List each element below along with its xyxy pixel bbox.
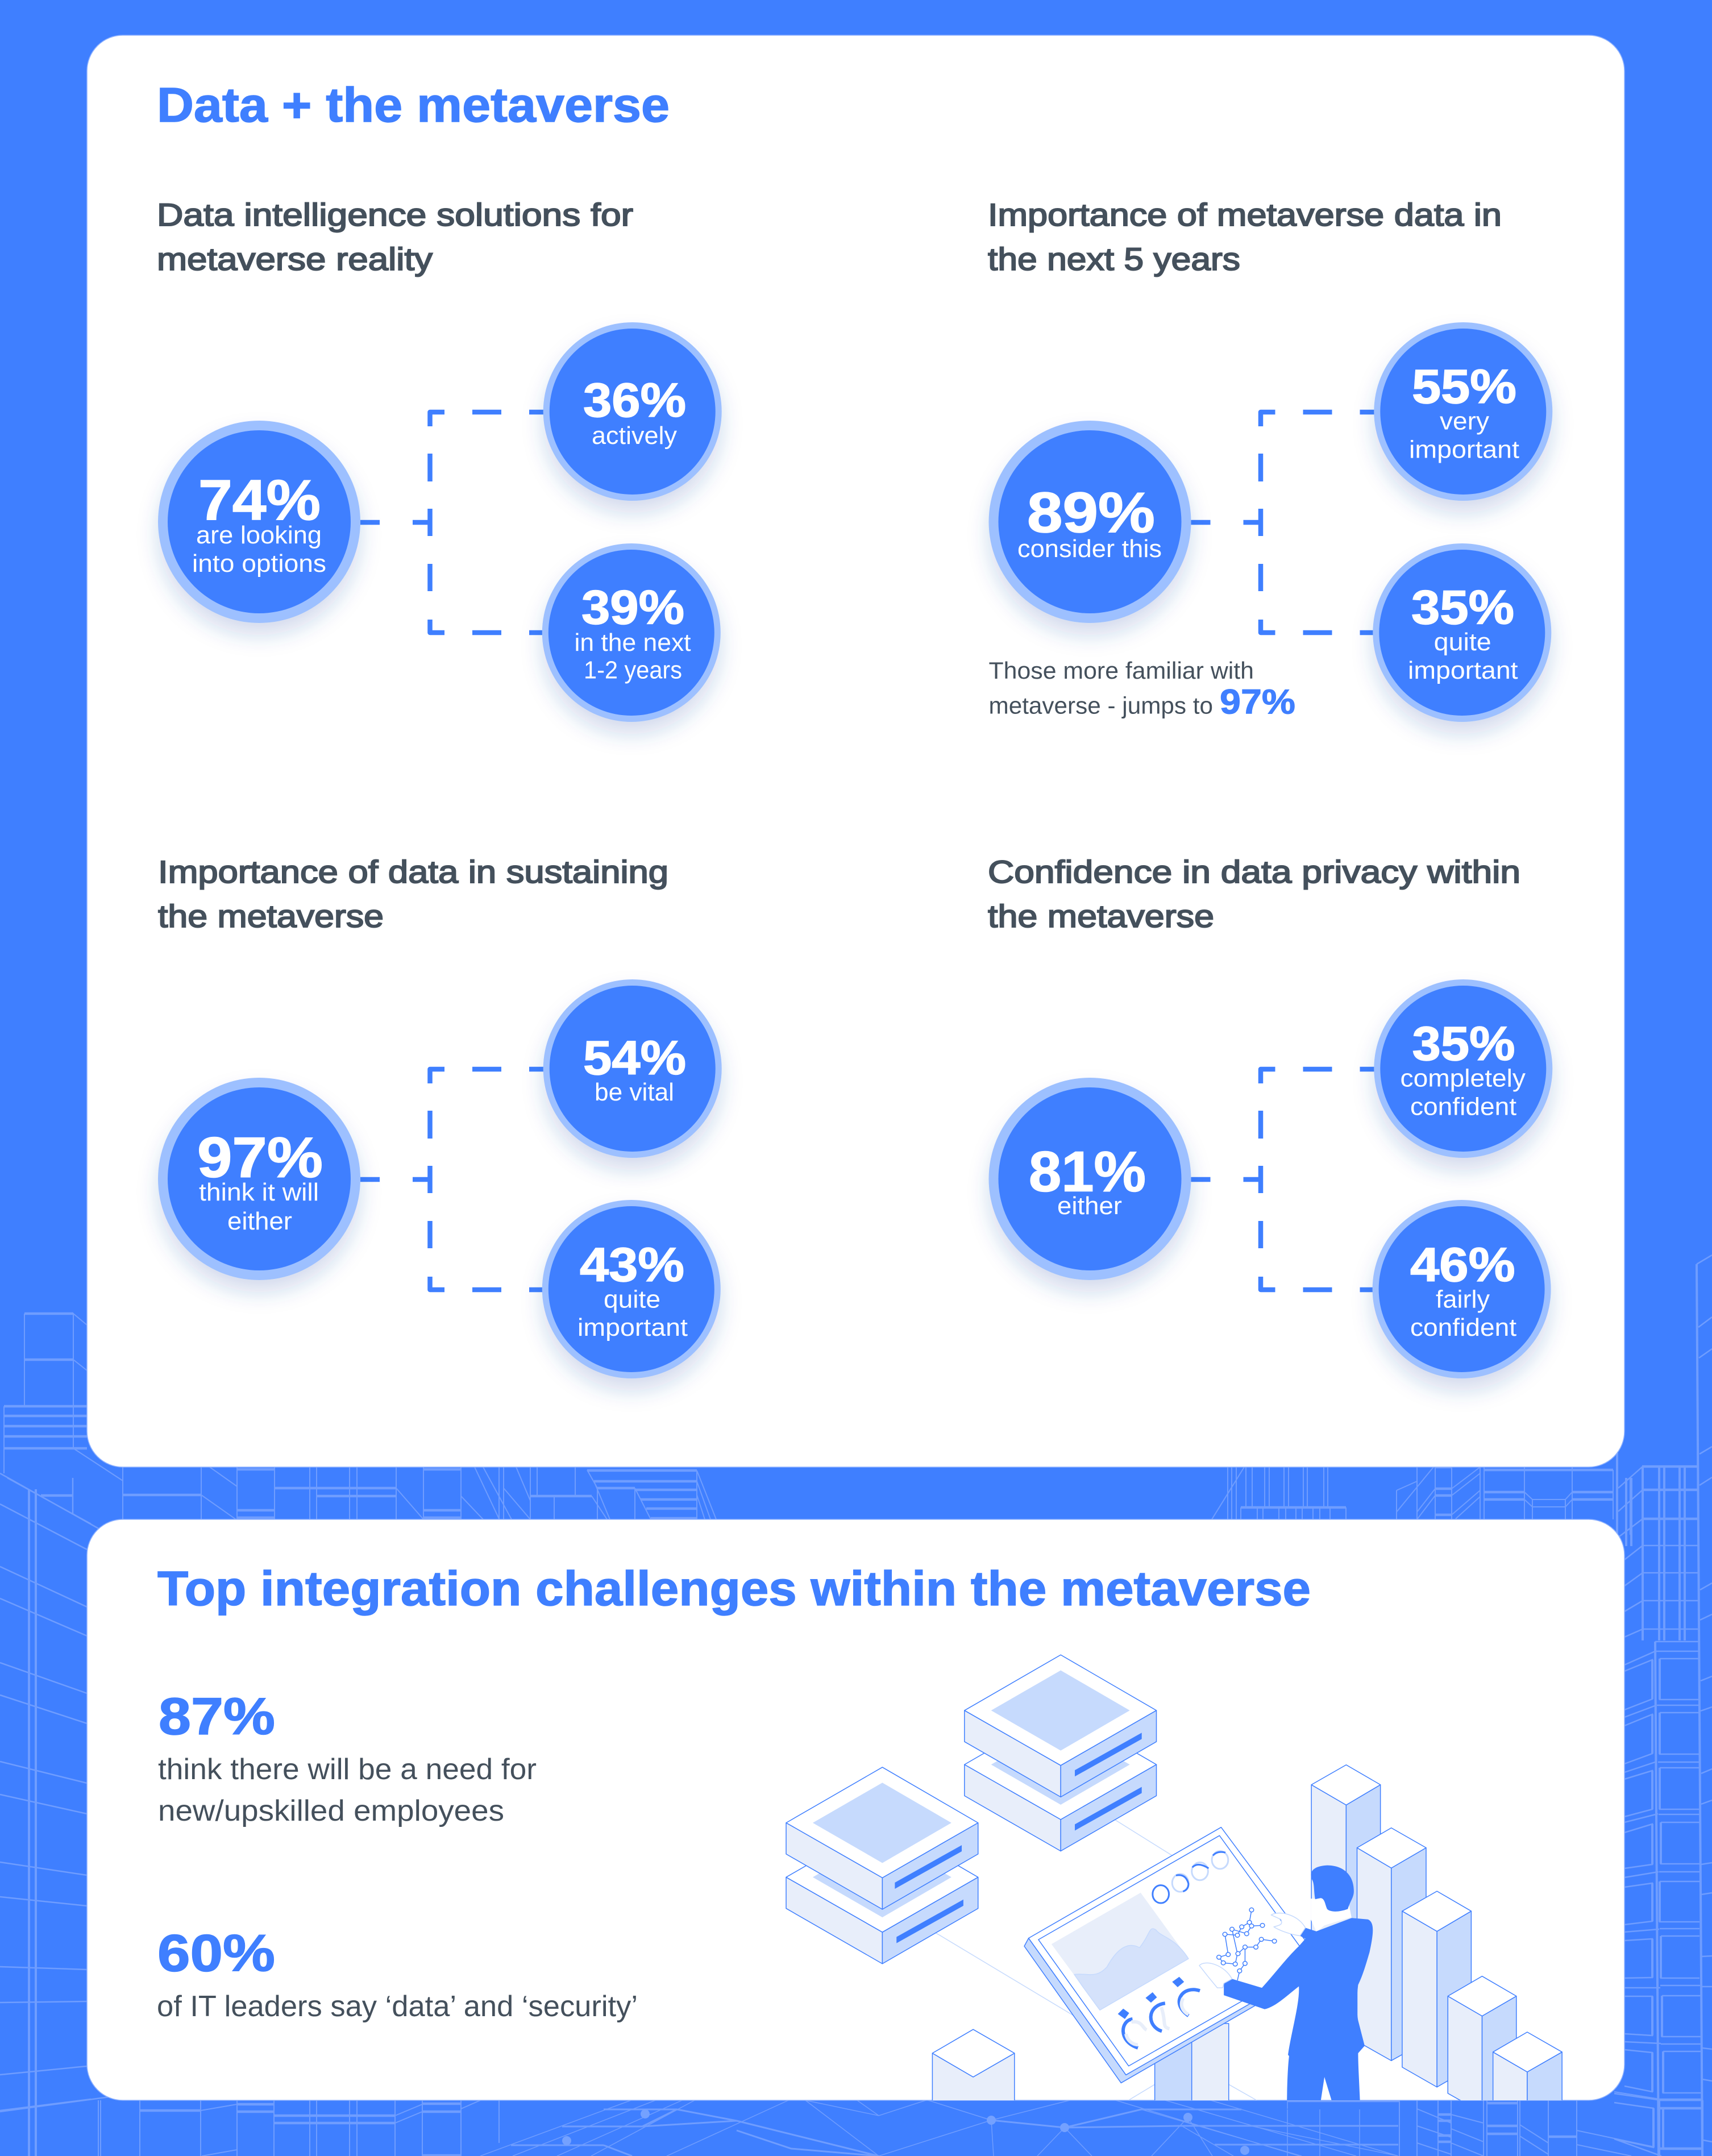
section 1 heading: Data intelligence solutions for xyxy=(157,197,633,232)
circle: 46% xyxy=(1373,1200,1551,1378)
right building xyxy=(1617,1264,1702,2156)
circle: 97%: think it will xyxy=(199,1178,319,1206)
panel: top integration challenges xyxy=(87,1519,1624,2113)
circle: 36%: 36% xyxy=(583,373,686,427)
circle: 39%: 39% xyxy=(581,581,684,634)
circle: 35% completely confident: completely xyxy=(1401,1064,1526,1092)
circle: 54%: be vital xyxy=(595,1078,674,1106)
tablet chart xyxy=(1052,1893,1189,2010)
bar column 4 xyxy=(1448,1976,1516,2113)
support column xyxy=(1129,2023,1256,2100)
callout: familiar with metaverse jumps to 97% xyxy=(989,657,1295,721)
stat: 87%: think there will be a need for xyxy=(158,1753,537,1786)
circle: 55%: very xyxy=(1440,407,1489,435)
circle: 43%: quite xyxy=(604,1286,660,1313)
tablet xyxy=(1024,1827,1322,2083)
panel: data + the metaverse xyxy=(87,35,1624,1467)
circle: 35% quite important: 35% xyxy=(1411,581,1514,634)
section 3 heading: Importance of data in sustaining xyxy=(158,854,668,890)
circle: 36%: actively xyxy=(592,422,677,450)
circle: 46%: 46% xyxy=(1410,1238,1515,1291)
bottom right xyxy=(1399,2092,1703,2156)
circle: 74%: are looking xyxy=(196,521,322,549)
stat: 60%: of IT leaders say ‘data’ and ‘security’ xyxy=(157,1990,638,2023)
circle: 81%: either xyxy=(1057,1192,1122,1220)
circle: 35% completely confident: 35% xyxy=(1412,1017,1515,1070)
section 3 heading xyxy=(158,854,668,934)
circle: 74%: 74% xyxy=(198,468,321,532)
tablet network xyxy=(1219,1910,1274,1980)
connector: section 4 xyxy=(1191,1069,1377,1290)
circle: 54% xyxy=(543,979,722,1158)
circle: 89%: consider this xyxy=(1017,535,1162,563)
mid right band xyxy=(1212,1467,1613,1519)
bar column 2 xyxy=(1357,1828,1426,2061)
circle: 55%: 55% xyxy=(1412,360,1516,413)
tablet gauges xyxy=(1123,1989,1200,2048)
stat: 87%: new/upskilled employees xyxy=(158,1794,504,1827)
circle: 97% xyxy=(158,1078,360,1280)
callout: familiar with metaverse jumps to 97%: 97% xyxy=(1220,683,1295,721)
server stack: top right xyxy=(965,1655,1157,1851)
tablet dials xyxy=(1153,1851,1228,1903)
section 2 heading: the next 5 years xyxy=(988,241,1240,277)
circle: 89% xyxy=(989,421,1191,623)
circle: 55%: important xyxy=(1409,436,1519,464)
bottom strip xyxy=(98,2100,499,2156)
circle: 81% xyxy=(989,1078,1191,1280)
section 4 heading: Confidence in data privacy within xyxy=(988,854,1520,890)
illustration: person at tablet with servers and bars xyxy=(786,1655,1562,2113)
circle: 35% quite important xyxy=(1373,543,1551,722)
circle: 81%: 81% xyxy=(1029,1140,1146,1204)
circle: 46%: confident xyxy=(1410,1314,1516,1341)
section 2 heading xyxy=(988,197,1502,277)
circle: 43%: important xyxy=(577,1314,688,1341)
person xyxy=(1199,1866,1373,2113)
section 4 heading: the metaverse xyxy=(988,898,1214,934)
circle: 35% quite important: important xyxy=(1408,657,1518,684)
circle: 54%: 54% xyxy=(583,1031,686,1085)
circle: 43% xyxy=(542,1200,721,1378)
stat: 60%: 60% xyxy=(157,1925,275,1983)
small block xyxy=(932,2029,1015,2100)
section 2 heading: Importance of metaverse data in xyxy=(988,197,1502,232)
connection lines xyxy=(936,1820,1172,2016)
connector: section 1 xyxy=(360,412,546,633)
circle: 89%: 89% xyxy=(1027,481,1155,545)
stat: 87% xyxy=(158,1688,537,1827)
callout: familiar with metaverse jumps to 97%: Those more familiar with xyxy=(989,657,1254,684)
circle: 43%: 43% xyxy=(580,1238,684,1291)
circle: 97%: 97% xyxy=(197,1126,323,1190)
background: wireframe city xyxy=(0,1255,1712,2156)
server stack: left xyxy=(786,1767,978,1964)
circle: 74% xyxy=(158,421,360,623)
title: Data + the metaverse: Data + the metaverse xyxy=(157,78,670,132)
bar column 1 xyxy=(1311,1764,1381,1931)
left strip xyxy=(29,1489,36,2156)
circle: 74%: into options xyxy=(192,550,326,578)
title: Top integration challenges: Top integration challenges within the metaverse xyxy=(157,1562,1311,1616)
circle: 46%: fairly xyxy=(1436,1286,1490,1313)
circle: 39%: 1-2 years xyxy=(584,656,682,684)
bar column 3 xyxy=(1402,1891,1471,2087)
circle: 39%: in the next xyxy=(574,629,691,657)
circle: 55% xyxy=(1374,322,1552,501)
circle: 35% quite important: quite xyxy=(1434,628,1491,656)
circle: 36% xyxy=(543,322,722,501)
section 3 heading: the metaverse xyxy=(158,898,384,934)
section 1 heading xyxy=(157,197,633,277)
connector: section 2 xyxy=(1191,412,1377,633)
circle: 97%: either xyxy=(227,1207,292,1235)
stat: 87%: 87% xyxy=(159,1688,275,1746)
section 4 heading xyxy=(988,854,1520,934)
section 1 heading: metaverse reality xyxy=(157,241,433,277)
connector: section 3 xyxy=(360,1069,546,1290)
callout: familiar with metaverse jumps to 97%: metaverse - jumps to xyxy=(989,692,1213,719)
circle: 35% completely confident xyxy=(1374,979,1552,1158)
bottom network xyxy=(511,2109,1398,2156)
circle: 39% xyxy=(542,543,721,722)
bar column 5 xyxy=(1493,2032,1563,2100)
circle: 35% completely confident: confident xyxy=(1410,1093,1516,1121)
stat: 60% xyxy=(157,1925,638,2023)
